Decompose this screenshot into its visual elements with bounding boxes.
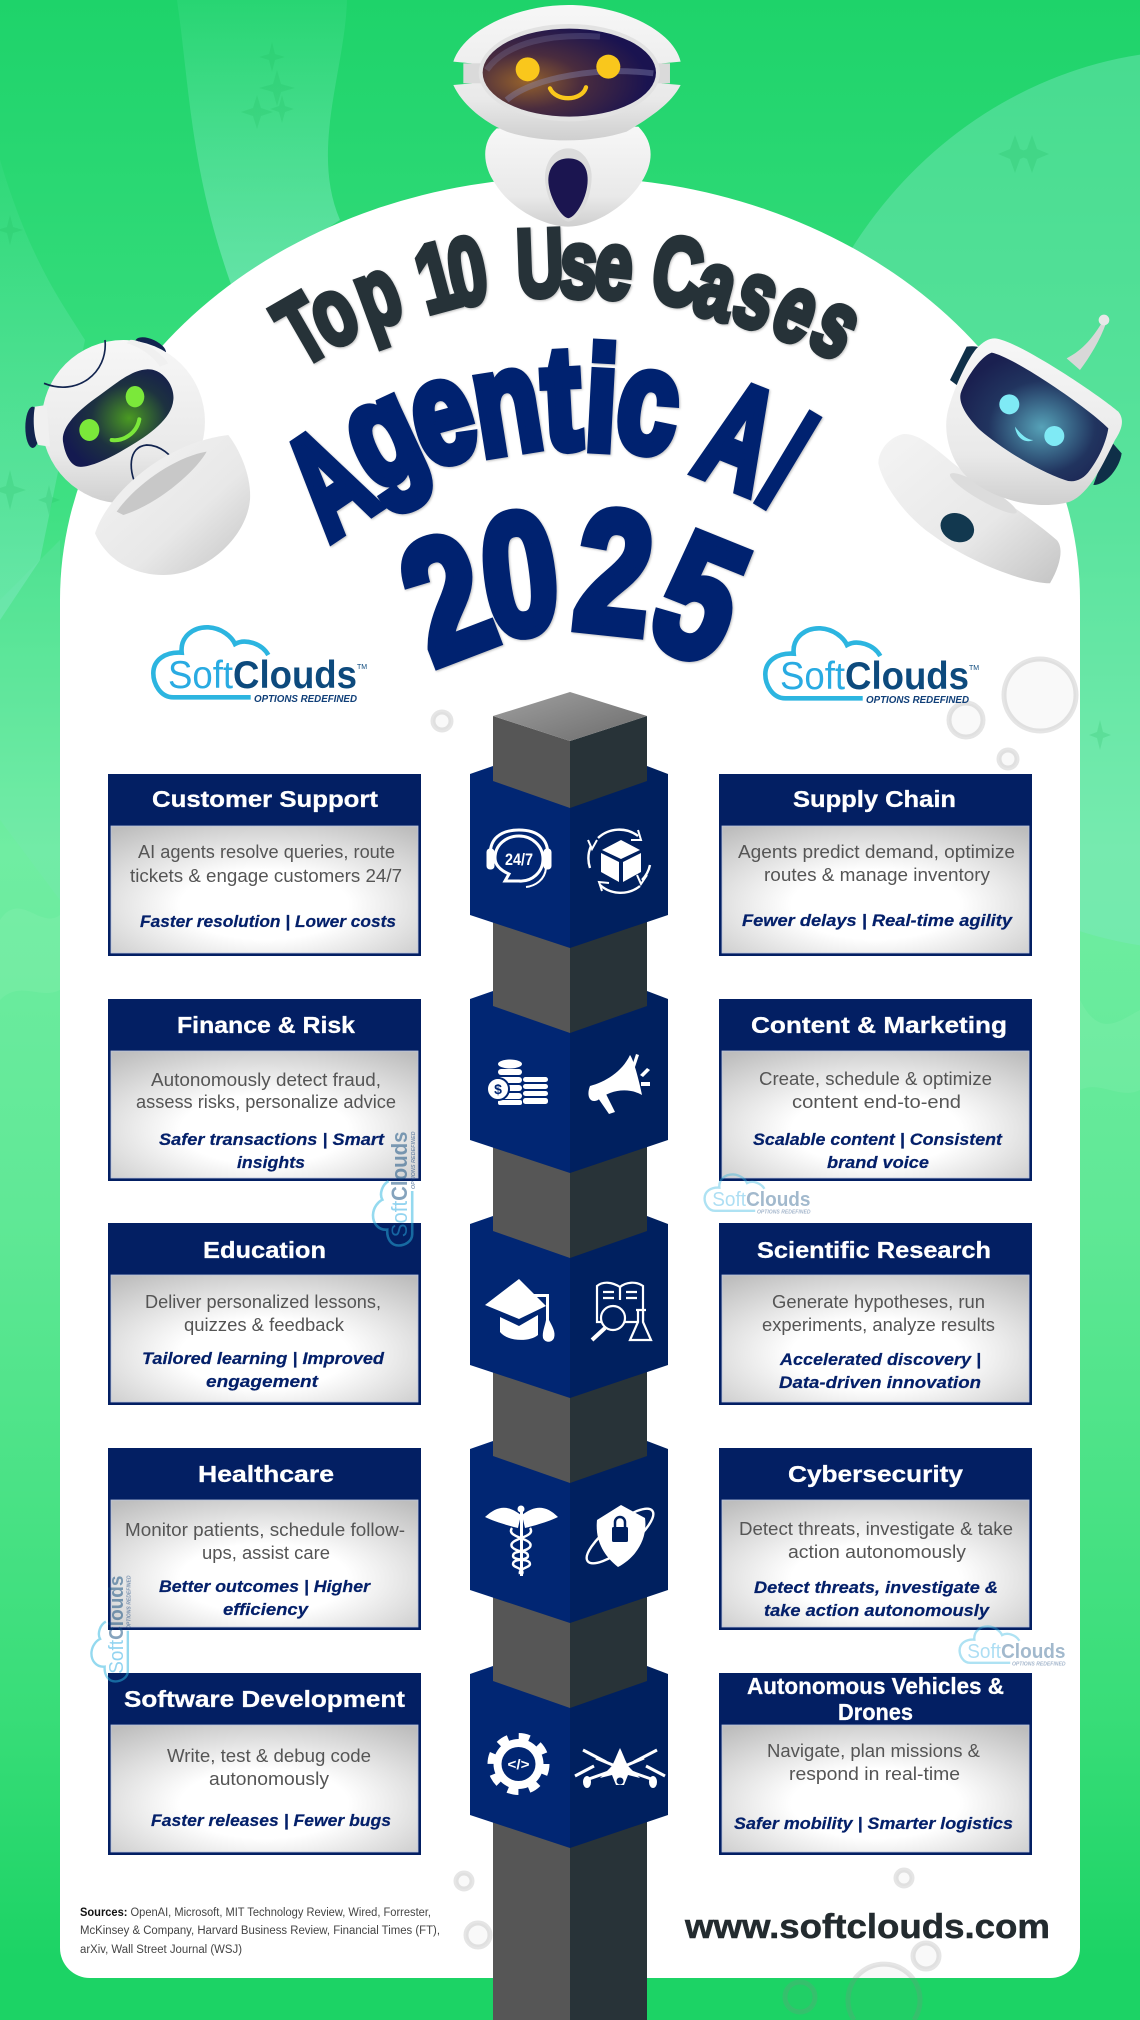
card: Software Development [108, 1673, 421, 1855]
icon: gear with code: </> [508, 1756, 530, 1772]
card: Cybersecurity: action autonomously [788, 1542, 966, 1562]
card: Finance & Risk [108, 999, 421, 1181]
logo: SoftClouds left: TM [357, 664, 367, 671]
card: Finance & Risk: Autonomously detect fraud, [151, 1070, 381, 1090]
sources text: McKinsey & Company, Harvard Business Review, Financial Times (FT), [80, 1925, 440, 1937]
card: Content & Marketing: content end-to-end [792, 1092, 961, 1112]
card: Autonomous Vehicles & Drones: Navigate, plan missions & [767, 1741, 980, 1761]
watermark logo: row 4 left rotated: OPTIONS REDEFINED [126, 1575, 132, 1629]
icon: book, magnifier and flask [592, 1283, 651, 1340]
card: Education: Education [203, 1237, 326, 1263]
title line: Top 10 Use Cases: e [758, 252, 836, 366]
watermark logo: row 4 right [960, 1626, 1066, 1667]
title line: Agentic AI: t [538, 316, 584, 480]
card: Software Development: Faster releases | Fewer bugs [151, 1811, 391, 1830]
sources text: arXiv, Wall Street Journal (WSJ) [80, 1944, 242, 1956]
card: Content & Marketing: Create, schedule & optimize [759, 1069, 992, 1089]
icon: drone [575, 1748, 665, 1788]
logo: SoftClouds right: SoftClouds [780, 655, 969, 698]
icon: gear with code [491, 1736, 546, 1792]
card: Scientific Research: experiments, analyze results [762, 1315, 995, 1335]
card: Cybersecurity: take action autonomously [764, 1601, 991, 1620]
title line: 2025: 2 [377, 494, 516, 701]
white arch panel [60, 177, 1080, 1978]
card: Cybersecurity: Detect threats, investigate & [754, 1578, 998, 1597]
title line: Agentic AI: e [392, 327, 491, 498]
logo: SoftClouds left [153, 627, 367, 705]
logo: SoftClouds left: OPTIONS REDEFINED [254, 693, 357, 705]
watermark logo: row 4 right: OPTIONS REDEFINED [1012, 1661, 1066, 1667]
title line: 2025: 2 [567, 472, 661, 671]
decorative bubbles [433, 659, 1076, 2020]
card: Scientific Research: Accelerated discovery | [779, 1350, 981, 1369]
band 2 with icons [470, 991, 668, 1173]
watermark logo: row 2 right: SoftClouds [712, 1189, 811, 1211]
card: Content & Marketing: Scalable content | Consistent [753, 1130, 1003, 1149]
central column [493, 692, 647, 2020]
icon: shield with padlock [580, 1501, 660, 1571]
robot: left green eyes [25, 333, 250, 575]
title line: Top 10 Use Cases: T [258, 274, 345, 386]
title line: Top 10 Use Cases: s [794, 268, 881, 380]
logo: SoftClouds right [765, 628, 979, 706]
icon: caduceus [485, 1506, 558, 1576]
card: Education: Deliver personalized lessons, [145, 1292, 381, 1312]
title line: Top 10 Use Cases: U [514, 210, 565, 318]
card: Cybersecurity [719, 1448, 1032, 1630]
band 3 with icons [470, 1216, 668, 1398]
icon: megaphone [588, 1054, 650, 1114]
website url: www.softclouds.com [684, 1908, 1050, 1946]
title line: Top 10 Use Cases: C [644, 214, 711, 329]
robot: top orange eyes [453, 5, 681, 227]
title line: Top 10 Use Cases: o [291, 255, 373, 370]
watermark logo: row 2 left rotated: SoftClouds [387, 1131, 412, 1237]
title line: Top 10 Use Cases: p [339, 235, 414, 351]
card: Finance & Risk: Safer transactions | Smart [159, 1130, 385, 1149]
icon: coin stacks: $ [494, 1081, 502, 1097]
card: Scientific Research [719, 1223, 1032, 1405]
title line: 2025: 5 [630, 494, 771, 701]
logo: SoftClouds right: OPTIONS REDEFINED [866, 694, 969, 706]
band 4 with icons [470, 1441, 668, 1623]
title line: Top 10 Use Cases: e [590, 210, 639, 321]
title line: 2025 [377, 472, 771, 701]
card: Cybersecurity: Cybersecurity [788, 1461, 963, 1487]
card: Education: quizzes & feedback [184, 1315, 345, 1335]
card: Customer Support: tickets & engage customers 24/7 [130, 866, 402, 886]
title line: 2025: 0 [471, 474, 569, 674]
watermark logo: row 4 right: SoftClouds [967, 1641, 1066, 1663]
card: Autonomous Vehicles & Drones [719, 1673, 1032, 1855]
icon: coin stacks [487, 1060, 548, 1105]
card: Education: Tailored learning | Improved [142, 1349, 385, 1368]
title line: Top 10 Use Cases: 1 [404, 220, 468, 334]
watermark logo: row 2 right [705, 1174, 811, 1215]
title line: Agentic AI: I [737, 386, 838, 535]
title line: Agentic AI: i [582, 317, 622, 481]
card: Scientific Research: Data-driven innovation [779, 1373, 981, 1392]
card: Scientific Research: Scientific Research [757, 1237, 991, 1263]
title line: Top 10 Use Cases: a [685, 228, 749, 342]
card: Content & Marketing: brand voice [827, 1153, 929, 1172]
card: Finance & Risk: assess risks, personalize advice [136, 1092, 396, 1112]
title line: Agentic AI: c [608, 319, 690, 487]
card: Autonomous Vehicles & Drones: Autonomous Vehicles & [747, 1673, 1004, 1699]
watermark logo: row 4 left rotated [91, 1575, 132, 1681]
title line: Top 10 Use Cases [258, 209, 881, 386]
band 1 with icons [470, 766, 668, 948]
title line: Top 10 Use Cases: s [721, 238, 793, 352]
card: Healthcare: ups, assist care [202, 1543, 330, 1563]
card: Autonomous Vehicles & Drones: Drones [838, 1699, 913, 1725]
title line: Top 10 Use Cases: 0 [440, 215, 495, 328]
card: Supply Chain: routes & manage inventory [764, 865, 990, 885]
card: Finance & Risk: insights [237, 1153, 305, 1172]
card: Healthcare [108, 1448, 421, 1630]
card: Autonomous Vehicles & Drones: respond in real-time [789, 1764, 960, 1784]
sources text: Sources: OpenAI, Microsoft, MIT Technology Review, Wired, Forrester, [80, 1907, 431, 1919]
card: Content & Marketing [719, 999, 1032, 1181]
robot: right blue eyes [878, 315, 1122, 583]
title line: Top 10 Use Cases: s [557, 209, 600, 319]
card: Healthcare: efficiency [223, 1600, 310, 1619]
card: Customer Support: Customer Support [152, 786, 378, 812]
icon: 24/7 headset: 24/7 [505, 850, 533, 869]
title line: Agentic AI: n [461, 318, 551, 488]
card: Supply Chain: Supply Chain [793, 786, 956, 812]
card: Healthcare: Monitor patients, schedule follow- [125, 1520, 405, 1540]
sources text [80, 1907, 440, 1956]
title line: Agentic AI: A [256, 396, 400, 567]
title line: Agentic AI: A [679, 349, 800, 524]
card: Cybersecurity: Detect threats, investigate & take [739, 1519, 1013, 1539]
logo: SoftClouds right: TM [969, 665, 979, 672]
title line: Agentic AI: g [318, 347, 445, 521]
card: Education [108, 1223, 421, 1405]
card: Software Development: Write, test & debug code [167, 1746, 371, 1766]
watermark logo: row 2 left rotated [373, 1131, 417, 1246]
card: Customer Support: Faster resolution | Lower costs [140, 912, 396, 931]
card: Finance & Risk: Finance & Risk [177, 1012, 355, 1038]
card: Scientific Research: Generate hypotheses, run [772, 1292, 985, 1312]
watermark logo: row 4 left rotated: SoftClouds [106, 1575, 128, 1674]
icon: graduation cap [485, 1279, 555, 1342]
card: Supply Chain [719, 774, 1032, 956]
card: Education: engagement [206, 1372, 319, 1391]
card: Healthcare: Better outcomes | Higher [159, 1577, 371, 1596]
card: Customer Support: AI agents resolve queries, route [138, 842, 395, 862]
card: Content & Marketing: Content & Marketing [751, 1012, 1007, 1038]
icon: 24/7 headset [488, 830, 550, 887]
icon: box with cycle arrows [588, 830, 650, 893]
card: Supply Chain: Fewer delays | Real-time agility [742, 911, 1014, 930]
watermark logo: row 2 left rotated: OPTIONS REDEFINED [411, 1131, 417, 1189]
card: Autonomous Vehicles & Drones: Safer mobility | Smarter logistics [734, 1814, 1013, 1833]
card: Software Development: Software Development [124, 1686, 405, 1712]
title line: Agentic AI [256, 316, 838, 567]
card: Healthcare: Healthcare [198, 1461, 334, 1487]
logo: SoftClouds left: SoftClouds [168, 654, 357, 697]
card: Software Development: autonomously [209, 1769, 329, 1789]
card: Customer Support [108, 774, 421, 956]
band 5 with icons [470, 1666, 668, 1848]
title [256, 209, 881, 701]
watermark logo: row 2 right: OPTIONS REDEFINED [757, 1209, 811, 1215]
card: Supply Chain: Agents predict demand, optimize [738, 842, 1015, 862]
